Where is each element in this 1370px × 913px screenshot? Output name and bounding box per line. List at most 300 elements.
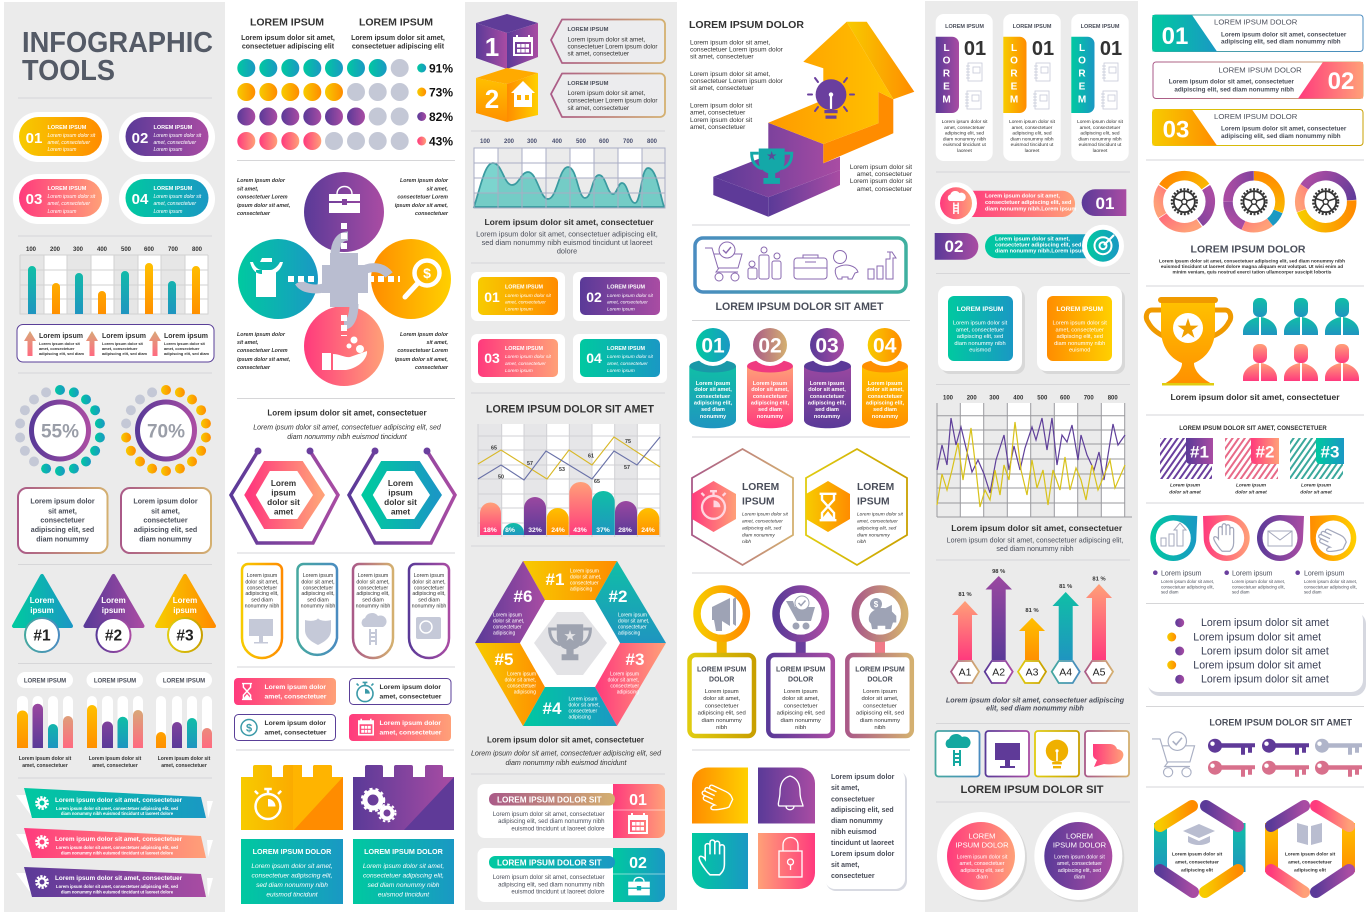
hexagon wheel: consectetuer [493,624,522,630]
numbered cards: Lorem ipsum dolor sit [505,354,552,360]
numbered pills: LOREM IPSUM [154,125,193,131]
icon: magnifier: $ [423,265,431,281]
text: corner captions: ipsum dolor sit amet, [237,203,291,209]
panel: column six [1146,15,1366,892]
capsule rows: consectetuer adipiscing elit, sed [985,200,1072,206]
numbered tab banners: Lorem ipsum dolor sit amet, consectetuer [1169,79,1295,86]
text: corner captions: sit amet, [237,340,259,346]
text block: Lorem ipsum dolor sit [850,164,912,171]
ribbon cards: amet, consectetuer [944,125,985,131]
ribbon cards: R [1078,68,1086,80]
text: corner captions: Lorem ipsum dolor [237,178,286,184]
framed cards: diam nonummy nibh [1054,341,1105,347]
hexagon wheel: dolor sit amet, [618,618,649,624]
numbered pills: Lorem ipsum dolor sit [154,194,202,200]
text block [471,736,662,767]
text block: Lorem ipsum dolor sit [690,117,752,124]
hexagon features: diam nonummy [857,532,890,538]
italic caption [946,696,1125,713]
italic caption: elit, sed diam nonummy nibh [986,705,1085,713]
circle cards [937,812,1124,902]
circle cards: Lorem ipsum dolor sit [957,854,1008,860]
pin cards: diam nonummy [781,718,821,724]
numbered cards [471,272,667,383]
legend box with arrows: Lorem ipsum dolor sit [164,341,206,346]
hexagon badges: amet [274,506,293,516]
numbered tab banners: LOREM IPSUM DOLOR [1218,66,1302,74]
combo chart: 75 [625,439,631,445]
text boxes: adipiscing elit, sed [31,526,94,534]
hatched rank badges: LOREM IPSUM DOLOR SIT AMET, CONSECTETUER [1179,426,1327,432]
heading pair: Lorem ipsum dolor sit amet, [241,35,335,42]
hexagon wheel: adipiscing [514,690,536,696]
hexagon features: amet, consectetuer [857,519,898,525]
tag cards: nonummy nibh [412,604,446,610]
ribbon cards: laoreet [1025,148,1040,154]
icon squares [936,731,1129,776]
droplet captions: Lorem ipsum dolor sit amet, [1304,579,1357,584]
area chart: 500 [576,139,587,145]
pin cards: adipiscing elit, sed [777,711,825,717]
mini bar charts [17,672,212,769]
rank arrows [14,576,214,652]
bullet list panel [1146,608,1366,696]
hexagon wheel: Lorem ipsum [610,672,639,678]
callout arrows: sit amet, consectetuer [568,105,629,112]
line chart: 200 [967,396,977,402]
text block: Lorem ipsum dolor sit amet, consectetuer adipiscing elit, sed [471,750,662,758]
cylinders: sed diam [873,407,897,413]
keys [1208,739,1362,777]
text card [825,769,907,891]
ribbon cards: Lorem ipsum dolor sit [1009,119,1056,125]
hexagon wheel: consectetuer [610,684,639,690]
numbered cards: Lorem ipsum [505,306,533,312]
text block: LOREM IPSUM DOLOR [1191,244,1306,256]
droplet captions: consectetuer adipiscing elit, [1161,584,1214,589]
teal description boxes: consectetuer adipiscing elit, [251,872,333,880]
title [22,27,213,87]
text block: Lorem ipsum dolor sit amet, consectetuer adipiscing elit, [947,536,1123,544]
hexagon features: LOREM [857,482,894,493]
bullet list panel: Lorem ipsum dolor sit amet [1201,617,1329,629]
ribbon cards: Lorem ipsum dolor sit [1077,119,1124,125]
four circle diagram [237,172,451,386]
title: INFOGRAPHIC [22,27,213,59]
small labelled buttons: $ [246,722,252,734]
icon: briefcase [329,186,360,213]
tag cards: nonummy nibh [356,604,390,610]
hatched rank badges: dolor sit amet [1235,490,1267,496]
text: corner captions: ipsum dolor sit amet, [395,203,449,209]
ribbon cards: E [1079,82,1086,92]
cylinders: consectetuer [696,394,731,400]
segmented hexagon left: Lorem ipsum dolor sit [1172,852,1223,858]
ribbon cards: adipiscing elit, sed [945,130,984,136]
hexagon wheel: Lorem ipsum [570,568,599,574]
text block [1159,244,1345,276]
numbered cards: Lorem ipsum [607,306,635,312]
framed cards: LOREM IPSUM [957,306,1004,313]
text block: Lorem ipsum dolor sit amet, consectetuer adipiscing elit, [476,230,658,238]
text: corner captions: consectetuer Lorem [237,194,288,200]
legend box with arrows: Lorem ipsum dolor sit [39,341,81,346]
ribbons [16,788,213,897]
bullet list panel: Lorem ipsum dolor sit amet [1201,645,1329,657]
cube 2: 2 [485,84,499,114]
droplet captions: consectetuer adipiscing elit, [1304,584,1357,589]
ribbon cards: 01 [1100,38,1122,60]
hexagon badges: ipsum [271,488,296,498]
pin cards: DOLOR [867,676,893,684]
hexagon wheel: dolor sit amet, [505,678,536,684]
segmented hexagon right: amet, consectetuer [1288,860,1332,866]
icon: bulb [808,78,854,119]
small labelled buttons: Lorem ipsum dolor [264,720,326,727]
text block: sed diam nonummy nibh [996,545,1074,553]
arrow chart: 98 % [992,569,1005,575]
cylinders: sed diam [815,407,839,413]
text: corner captions: consectetuer [237,211,271,217]
ribbon cards: O [1010,56,1018,66]
numbered pills: Lorem ipsum [48,147,76,153]
text: corner captions: Lorem ipsum dolor [400,332,449,338]
text block: consectetuer Lorem ipsum dolor [690,46,784,54]
callout arrows: LOREM IPSUM [568,81,609,87]
tag cards: adipiscing elit, [245,591,279,597]
hexagon wheel: dolor sit amet, [570,574,601,580]
text block: Lorem ipsum dolor sit amet, consectetuer [484,217,654,227]
hexagon wheel: adipiscing [617,690,639,696]
area chart: 200 [504,139,515,145]
rank arrows: ipsum [30,606,54,615]
rank arrows: #2 [105,628,122,644]
line chart: 800 [1108,396,1118,402]
bullet list panel: Lorem ipsum dolor sit amet [1201,674,1329,686]
bullet list panel: Lorem ipsum dolor sit amet [1193,659,1321,671]
circle cards: amet, consectetuer [1057,861,1102,867]
ribbon cards: R [1010,68,1018,80]
tag cards: Lorem ipsum [414,573,445,579]
cylinders: dolor sit amet, [808,387,846,393]
hexagon wheel: dolor sit amet, [608,678,639,684]
bar chart: 800 [192,247,203,253]
circle cards: diam [976,874,988,880]
framed cards: adipiscing elit, sed [1056,334,1103,340]
legend box with arrows: Lorem ipsum dolor sit [102,341,144,346]
text card: tincidunt ut laoreet [831,840,895,847]
icon: bottle [250,258,283,297]
cylinders: sed diam [701,407,725,413]
mini bar charts: LOREM IPSUM [163,678,205,684]
caption: Lorem ipsum dolor sit amet, consectetuer [1170,392,1340,402]
text block: sit amet, consectetuer [690,54,754,60]
numbered cards: 01 [484,289,500,305]
line chart: 400 [1013,396,1024,402]
text boxes: Lorem ipsum dolor [133,497,198,505]
pin cards: dolor sit amet, [703,696,741,702]
hexagon wheel: consectetuer [618,624,647,630]
droplet captions: Lorem ipsum dolor sit amet, [1161,579,1214,584]
line chart: 100 [943,396,954,402]
callout arrows: Lorem ipsum dolor sit amet, [568,90,645,97]
hexagon wheel: adipiscing [568,714,591,720]
text block: Lorem ipsum dolor sit amet, consectetuer [267,408,427,418]
droplet captions: sed diam [1161,590,1179,594]
capsule rows: Lorem ipsum dolor sit amet, [985,194,1060,200]
cylinders: consectetuer [753,394,788,400]
arrow chart: A2 [992,666,1005,678]
mini bar charts: Lorem ipsum dolor sit [158,756,211,762]
capsule rows: 01 [1096,194,1114,213]
pin cards: DOLOR [788,676,813,684]
ribbon cards: M [942,94,951,106]
text block: consectetuer Lorem ipsum dolor [690,78,784,85]
ribbon cards: O [1078,56,1086,66]
ribbons: diam nonummy nibh euismod tincidunt ut laoreet dolore [61,811,174,816]
numbered cards: amet, consectetuer [607,361,648,367]
text block: diam nonummy nibh euismod tincidunt [287,434,408,441]
arrow chart: 81 % [958,592,972,598]
pin cards [690,589,912,736]
small labelled buttons: Lorem ipsum dolor [380,684,441,691]
icon: megaphone [712,597,736,631]
tag cards: consectetuer [303,586,333,592]
text boxes: sit amet, [48,507,77,515]
combo chart: 24% [641,527,655,534]
text: corner captions: Lorem ipsum dolor [237,332,286,338]
tag cards: Lorem ipsum [247,573,278,579]
droplet captions: sed diam [1232,590,1250,594]
arrow chart: A3 [1026,666,1039,678]
numbered banners: 01 [629,792,647,809]
segmented hexagon right: adipiscing elit [1294,867,1326,873]
hexagon features: Lorem ipsum dolor sit [742,512,789,518]
text block: sed diam nonummy nibh euismod tincidunt ut laoreet [482,238,652,247]
dot percent chart: 43% [429,134,453,148]
hexagon wheel: Lorem ipsum [493,612,522,618]
hexagon wheel: Lorem ipsum [507,672,536,678]
numbered cards: Lorem ipsum dolor sit [607,293,654,299]
hexagon badges [231,448,455,543]
combo chart: 57 [624,465,630,471]
cylinders: adipiscing elit, [866,400,905,406]
cylinders: adipiscing elit, [694,400,733,406]
small labelled buttons: amet, consectetuer [264,730,327,736]
tag cards: consectetuer [414,586,444,592]
numbered tab banners: Lorem ipsum dolor sit amet, consectetuer [1221,31,1347,38]
numbered tab banners: 01 [1162,23,1188,50]
text block [476,217,658,256]
ribbon cards: E [943,82,950,92]
numbered pills: amet, consectetuer [154,201,196,207]
text block: Lorem ipsum dolor sit [690,102,752,110]
bar chart: 100 [26,247,37,253]
legend box with arrows: adipiscing elit, sed diam [164,351,210,356]
hatched rank badges: Lorem ipsum [1301,482,1332,488]
arrow chart: A1 [959,666,972,678]
text boxes: diam nonummy [36,535,89,543]
teal description boxes [241,839,454,904]
rank arrows: Lorem [30,596,54,605]
circle cards: diam [1074,874,1086,880]
numbered cards: 03 [484,350,500,366]
ribbon cards: amet, consectetuer [1080,125,1121,131]
droplet captions: Lorem ipsum [1304,570,1345,578]
ribbon cards: LOREM IPSUM [945,24,984,30]
ribbon cards: adipiscing elit, sed [1012,130,1052,136]
line chart [937,396,1132,517]
cylinders: dolor sit amet, [694,387,732,393]
hexagon features: adipiscing elit, sed [742,526,782,532]
bar chart [20,247,208,314]
framed cards [938,286,1125,374]
numbered tab banners: adipiscing elit, sed diam nonummy nibh [1174,86,1294,93]
line chart: 500 [1037,396,1048,402]
dot percent chart: 82% [429,110,453,124]
text card: nibh euismod [831,829,876,836]
text block: Lorem ipsum dolor sit amet, [690,40,770,46]
text: corner captions: consectetuer Lorem [397,194,448,200]
droplet captions: Lorem ipsum [1232,570,1273,578]
hexagon wheel: Lorem ipsum [568,696,597,702]
circle cards: IPSUM DOLOR [1053,840,1107,850]
bar chart: 500 [121,247,132,253]
small labelled buttons [234,678,451,741]
pin cards: Lorem ipsum [784,689,818,695]
numbered banners: euismod tincidunt ut laoreet dolore [511,826,605,832]
hatched rank badges: Lorem ipsum [1170,482,1201,488]
arrow chart: A5 [1093,666,1106,678]
teal description boxes: sed diam nonummy nibh [368,882,440,889]
text block [947,523,1123,553]
droplet captions: Lorem ipsum [1161,570,1202,578]
pin cards: nibh [716,725,727,731]
hatched rank badges: #1 [1190,442,1209,462]
ribbon cards: L [943,43,950,54]
ribbons: diam nonummy nibh euismod tincidunt ut laoreet dolore [61,850,174,856]
numbered cards: Lorem ipsum dolor sit [505,293,552,299]
legend box with arrows: Lorem ipsum [164,333,208,340]
numbered cards: Lorem ipsum [607,368,635,374]
text boxes: consectetuer [40,517,85,525]
ribbon cards: 01 [1032,38,1054,60]
text: corner captions: consectetuer [415,365,449,371]
pin cards: consectetuer [863,704,897,710]
numbered pills: amet, consectetuer [48,201,90,207]
area chart: 100 [480,139,491,145]
cylinders: Lorem ipsum [696,381,730,387]
text block: euismod tincidunt ut laoreet dolore magna aliquam erat volutpat. Ut wisi enim ad [1161,264,1343,270]
ribbon cards: amet, consectetuer [1012,125,1053,131]
hexagon features: amet, consectetuer [742,519,783,525]
legend box with arrows: Lorem ipsum [39,333,83,340]
circle cards: LOREM [968,832,996,840]
framed cards: amet, consectetuer [1056,327,1104,333]
hexagon wheel: #6 [514,587,532,606]
teal description boxes: consectetuer adipiscing elit, [363,872,444,880]
text boxes: sit amet, [151,507,180,515]
text: corner captions: ipsum dolor sit amet, [237,357,291,363]
hexagon features [692,449,907,565]
teal description boxes: euismod tincidunt [266,892,319,898]
cube 1 [476,14,538,69]
ribbon cards: M [1010,94,1018,106]
pin cards: diam nonummy [860,718,900,724]
ribbon cards: euismod tincidunt ut [943,142,986,148]
framed cards: euismod [969,347,991,353]
numbered cards: LOREM IPSUM [607,284,646,290]
arrow chart: 81 % [1025,608,1039,614]
text block: diam nonummy nibh euismod tincidunt [505,759,628,767]
mini bar charts: Lorem ipsum dolor sit [19,756,72,762]
tag cards: Lorem ipsum [358,573,389,579]
numbered banners: LOREM IPSUM DOLOR SIT [497,796,602,804]
text card: sit amet, [831,785,859,792]
capsule rows: diam nonummy nibh.Lorem ipsum [985,206,1076,212]
panel: column two [231,16,455,904]
bar chart: 600 [144,247,155,253]
numbered cards: LOREM IPSUM [505,284,544,290]
hexagon badges: Lorem [388,478,413,488]
tag cards: adipiscing elit, [301,591,335,597]
combo chart: 24% [551,527,565,534]
ribbons: Lorem ipsum dolor sit amet, consectetuer adipiscing elit, sed [56,884,178,889]
icon: piggy bank [869,598,896,629]
cylinders: dolor sit amet, [866,387,904,393]
icon: gold trophy [1146,297,1231,386]
combo chart: 32% [528,527,542,534]
hatched rank badges [1160,426,1344,496]
pin cards: Lorem ipsum [863,689,897,695]
ribbon cards: laoreet [1093,148,1108,154]
dot percent chart: 91% [429,62,453,76]
cylinders: sed diam [758,407,782,413]
rank arrows: #3 [176,628,194,644]
numbered cards: amet, consectetuer [505,300,546,306]
numbered banners: adipiscing elit, sed diam nonummy nibh [498,818,604,825]
cylinders: consectetuer [868,394,903,400]
mini bar charts: LOREM IPSUM [94,678,136,684]
numbered pills: 03 [26,191,42,208]
pin cards: dolor sit amet, [782,696,820,702]
rank arrows: Lorem [101,596,126,605]
text card: adipiscing elit, sed [831,807,894,814]
dot percent chart [237,59,453,150]
bar chart: 700 [168,247,179,253]
numbered banners: euismod tincidunt ut laoreet dolore [511,888,605,896]
bar chart: 300 [73,247,84,253]
heading pair: consectetuer adipiscing elit [352,44,445,50]
tag cards: sed diam [418,598,440,604]
text: corner captions: sit amet, [426,186,449,192]
text block: amet, consectetuer [690,124,746,131]
donut gauge 55 percent: 55% [41,422,79,442]
combo chart: 18% [483,527,497,534]
cylinders: 01 [701,334,725,358]
hatched rank badges: Lorem ipsum [1236,482,1267,488]
hexagon wheel: Lorem ipsum [618,612,647,618]
text block: Lorem ipsum dolor sit amet, consectetuer adipiscing elit, sed diam nonummy nibh [1159,258,1345,264]
area chart: 700 [623,139,634,145]
framed cards: euismod [1069,347,1090,353]
hexagon wheel: consectetuer [570,580,599,586]
capsule rows: consectetuer adipiscing elit, sed [995,242,1082,248]
pin cards: nibh [795,725,806,731]
pin cards: adipiscing elit, sed [856,711,904,717]
numbered pills: Lorem ipsum [48,209,76,215]
teal description boxes: LOREM IPSUM DOLOR [364,847,444,856]
